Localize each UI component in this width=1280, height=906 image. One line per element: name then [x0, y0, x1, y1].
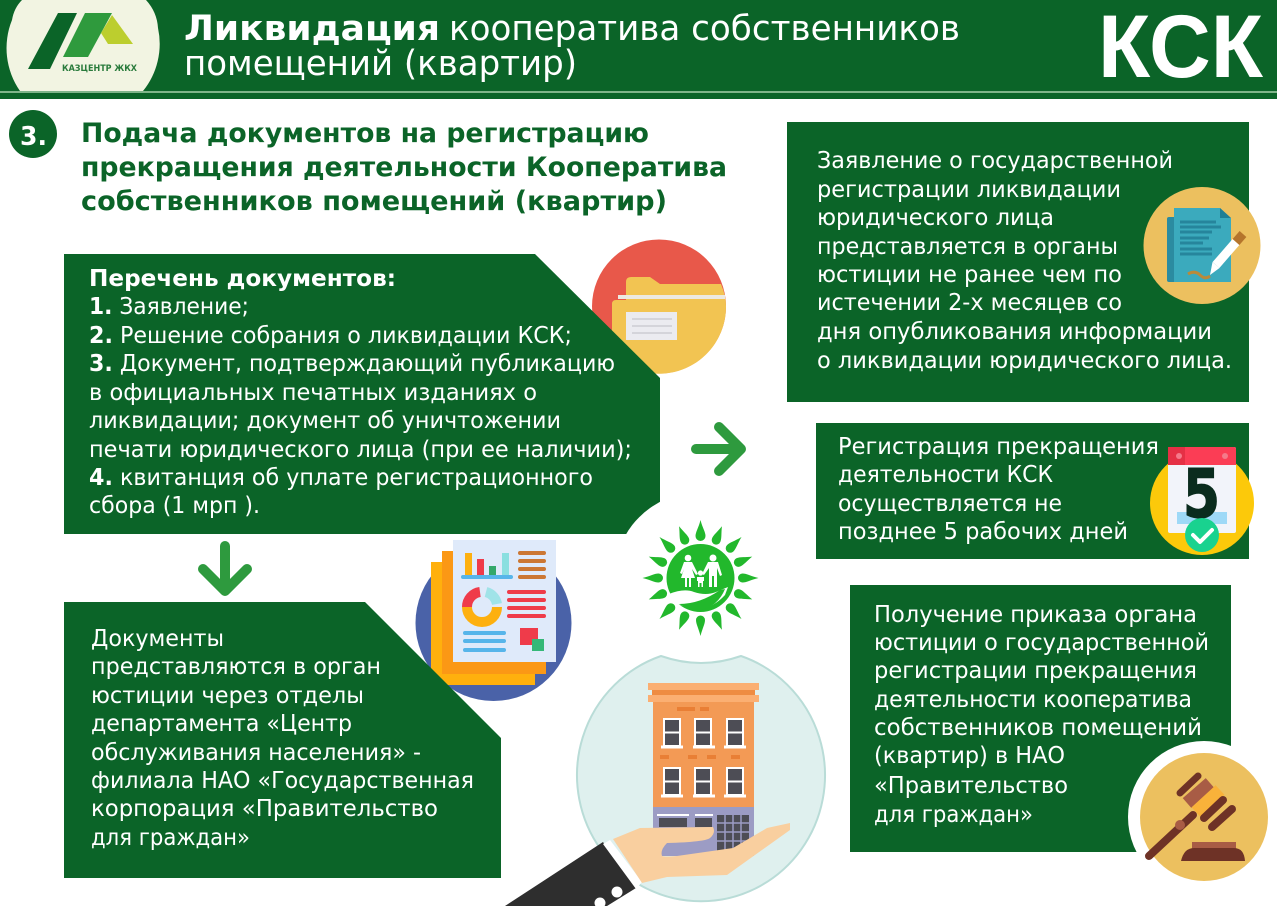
panel: submission route: для граждан» [91, 825, 250, 851]
panel: ministry order: Получение приказа органа [874, 602, 1197, 628]
panel: registration term: позднее 5 рабочих дней [838, 519, 1128, 545]
panel: application deadline: регистрации ликвидации [817, 177, 1121, 203]
icon: report documents [416, 540, 572, 701]
arrow: right [696, 427, 741, 471]
panel: ministry order: юстиции о государственной [874, 630, 1209, 656]
section heading: собственников помещений (квартир) [81, 186, 667, 217]
panel: registration term: Регистрация прекращения [838, 434, 1159, 460]
icon: folder [592, 240, 726, 374]
arrow: down [203, 546, 247, 591]
logo: Казцентр ЖКХ: КАЗЦЕНТР ЖКХ [62, 64, 137, 74]
icon: calendar five days: 5 [1183, 455, 1220, 533]
panel: application deadline: истечении 2-х месяцев со [817, 290, 1122, 316]
panel: document list: Перечень документов: [89, 266, 396, 292]
panel: ministry order: «Правительство [874, 773, 1068, 799]
panel: document list: сбора (1 мрп ). [89, 493, 260, 519]
panel: document list [64, 254, 660, 534]
icon: family sun emblem [642, 520, 758, 636]
panel: document list: 1. Заявление; [89, 294, 249, 320]
panel: application deadline: представляется в органы [817, 234, 1118, 260]
white halo around sun emblem [614, 492, 786, 664]
panel: document list: 3. Документ, подтверждающий публикацию [89, 351, 615, 377]
panel: document list: 2. Решение собрания о ликвидации КСК; [89, 323, 572, 349]
panel: registration term: деятельности КСК [838, 462, 1053, 488]
section heading: прекращения деятельности Кооператива [81, 152, 727, 183]
section heading: Подача документов на регистрацию [81, 118, 649, 149]
panel: submission route: обслуживания населения» - [91, 740, 421, 766]
step number badge: 3. [20, 122, 47, 152]
panel: ministry order: регистрации прекращения [874, 658, 1197, 684]
panel: document list: 4. квитанция об уплате регистрационного [89, 465, 593, 491]
panel: submission route [64, 602, 501, 878]
title [184, 9, 960, 84]
panel: ministry order: деятельности кооператива [874, 687, 1192, 713]
panel: application deadline [787, 122, 1249, 402]
panel: submission route: корпорация «Правительство [91, 796, 438, 822]
panel: document list: ликвидации; документ об уничтожении [89, 408, 561, 434]
panel: registration term [816, 423, 1249, 559]
panel: registration term: осуществляется не [838, 491, 1062, 517]
section heading [81, 118, 727, 217]
panel: submission route: Документы [91, 626, 224, 652]
panel: ministry order [850, 585, 1231, 852]
header band [0, 0, 1277, 99]
icon: calendar five days [1150, 447, 1254, 555]
panel: submission route: юстиции через отделы [91, 683, 364, 709]
panel: submission route: департамента «Центр [91, 711, 352, 737]
panel: application deadline: юридического лица [817, 205, 1054, 231]
title: помещений (квартир) [184, 44, 577, 84]
icon: gavel [1128, 741, 1280, 893]
panel: application deadline: Заявление о государственной [817, 148, 1173, 174]
title: кооператива собственников [449, 9, 960, 49]
panel: application deadline: о ликвидации юридического лица. [817, 348, 1232, 374]
panel: ministry order: (квартир) в НАО [874, 743, 1065, 769]
icon: signed document [1144, 187, 1260, 304]
panel: ministry order: собственников помещений [874, 715, 1202, 741]
title: Ликвидация [184, 9, 440, 49]
panel: application deadline: дня опубликования информации [817, 319, 1212, 345]
panel: submission route: представляются в орган [91, 654, 381, 680]
panel: application deadline: юстиции не ранее чем по [817, 262, 1122, 288]
panel: document list: в официальных печатных изданиях о [89, 380, 537, 406]
icon: building on hand [505, 656, 825, 906]
panel: submission route: филиала НАО «Государственная [91, 768, 474, 794]
panel: ministry order: для граждан» [874, 802, 1033, 828]
step number badge [9, 110, 57, 158]
logo: Казцентр ЖКХ [7, 0, 160, 91]
panel: document list: печати юридического лица (при ее наличии); [89, 437, 632, 463]
